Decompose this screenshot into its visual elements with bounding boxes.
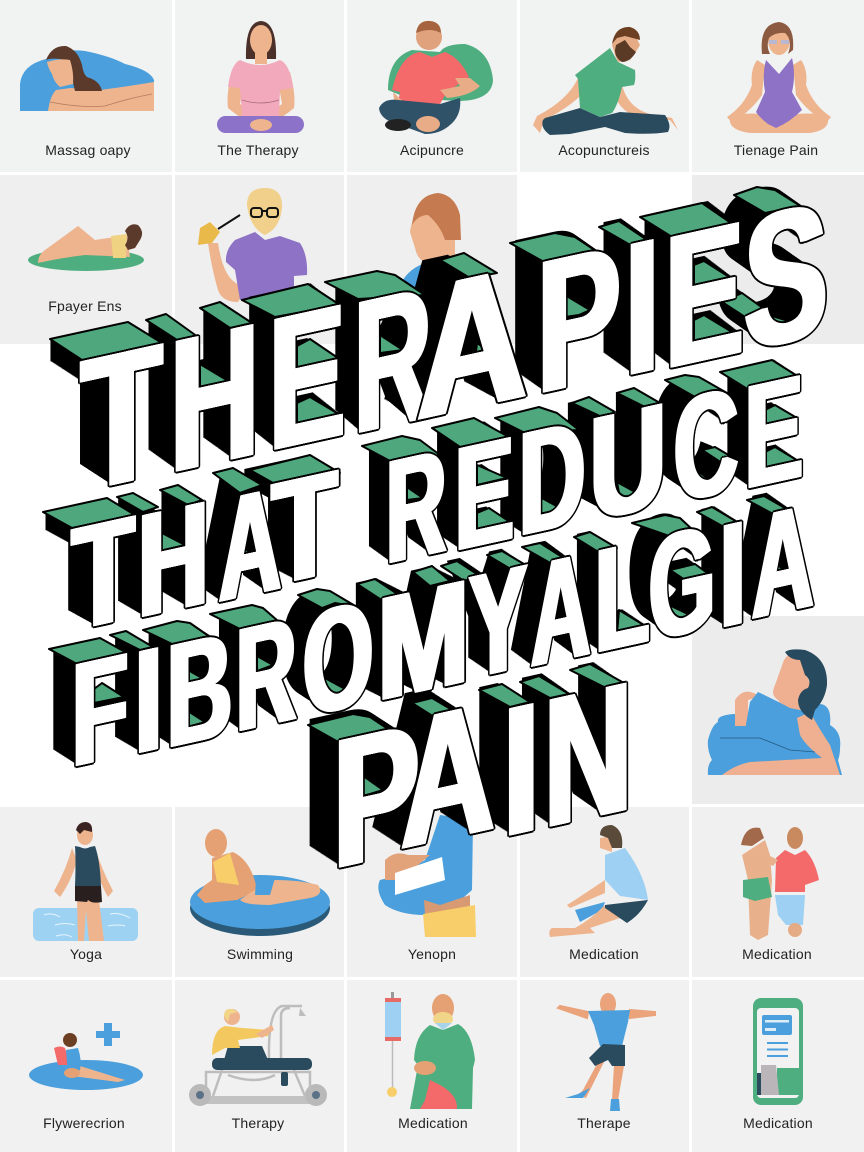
title line: FIBROMYALGIA: I xyxy=(720,489,745,660)
title xyxy=(42,162,828,909)
panel: yenopn xyxy=(347,807,517,977)
title: A xyxy=(752,472,813,651)
title: I xyxy=(625,198,660,417)
title: B xyxy=(167,600,232,780)
title line: THERAPIES: E xyxy=(268,263,345,492)
label: Medication xyxy=(742,946,812,962)
icon: bald man in purple shirt xyxy=(198,188,307,302)
label: The Therapy xyxy=(217,142,299,158)
title line: FIBROMYALGIA: R xyxy=(236,585,296,764)
icon: person on massage table xyxy=(20,46,154,111)
title line: FIBROMYALGIA: O xyxy=(303,568,373,749)
panel: man with hammer xyxy=(175,175,344,344)
panel: flywerecrion xyxy=(0,980,172,1152)
title line: FIBROMYALGIA: L xyxy=(595,508,650,685)
title line: PAIN xyxy=(333,643,632,909)
panel: yoga xyxy=(0,807,172,977)
icon: person lying on green mat xyxy=(28,224,144,271)
title line: PAIN: A xyxy=(401,662,495,889)
title: I xyxy=(720,489,745,660)
title line: THAT REDUCE xyxy=(70,343,804,663)
icon: seated woman in pink xyxy=(217,21,304,133)
title: E xyxy=(268,263,345,492)
title: L xyxy=(595,508,650,685)
title line: THAT REDUCE: A xyxy=(219,455,281,634)
title line: THERAPIES: T xyxy=(81,303,163,533)
panel: therapy chair xyxy=(175,980,344,1152)
panel: medication device xyxy=(692,980,864,1152)
title: I xyxy=(503,663,539,877)
title line: THERAPIES: P xyxy=(537,205,620,435)
title line: THERAPIES xyxy=(78,162,828,533)
icon: green medical device xyxy=(753,998,803,1105)
icon: seated man with green cushion xyxy=(379,21,493,134)
title: T xyxy=(81,303,163,533)
title: P xyxy=(333,684,419,909)
panel: woman on pillows xyxy=(692,616,864,804)
title line: THERAPIES: R xyxy=(354,246,432,475)
title: T xyxy=(272,438,337,618)
title: D xyxy=(519,388,585,568)
title line: THERAPIES: I xyxy=(625,198,660,417)
label: Acopunctureis xyxy=(558,142,650,158)
title line: FIBROMYALGIA: G xyxy=(649,493,716,673)
title: R xyxy=(236,585,296,764)
icon: two people xyxy=(741,827,819,940)
title line: FIBROMYALGIA: Y xyxy=(469,533,527,711)
title: T xyxy=(72,484,134,663)
title: A xyxy=(417,225,527,461)
title line: THAT REDUCE: H xyxy=(138,469,209,650)
title: A xyxy=(219,455,281,634)
panel: therape xyxy=(520,980,689,1152)
label: Medication xyxy=(743,1115,813,1131)
title line: THAT REDUCE: U xyxy=(590,371,666,553)
panel: medication IV xyxy=(347,980,517,1152)
title line: PAIN: P xyxy=(333,684,419,909)
title line: THERAPIES: A xyxy=(417,225,527,461)
panel: prayer ends xyxy=(0,175,172,344)
panel: medication stretch xyxy=(520,807,689,977)
title: Y xyxy=(469,533,527,711)
title line: THAT REDUCE: D xyxy=(519,388,585,568)
title line: FIBROMYALGIA: M xyxy=(378,548,468,733)
icon: man on blue float xyxy=(190,829,330,936)
icon: man stretching on floor xyxy=(549,825,648,937)
label: Therape xyxy=(577,1115,631,1131)
panel: top right second row xyxy=(692,175,864,344)
icon: arms holding paper xyxy=(378,815,476,937)
title line: THAT REDUCE: C xyxy=(674,356,739,535)
title: E xyxy=(665,181,744,410)
title line: THAT REDUCE: E xyxy=(744,343,802,521)
title: R xyxy=(386,417,446,596)
title: P xyxy=(537,205,620,435)
label: Swimming xyxy=(227,946,293,962)
icon: man with IV drip xyxy=(385,992,475,1109)
title line: FIBROMYALGIA: A xyxy=(752,472,813,651)
icon: person in pool with plus xyxy=(29,1023,143,1090)
title line: PAIN: I xyxy=(503,663,539,877)
icon: man on rehab machine xyxy=(189,1006,327,1106)
title: N xyxy=(544,643,632,868)
title: S xyxy=(744,162,828,392)
icon: man balancing with arms out xyxy=(558,993,655,1111)
label: Acipuncre xyxy=(400,142,464,158)
icon: person standing in water xyxy=(33,822,138,941)
title line: THERAPIES: E xyxy=(665,181,744,410)
title line: THAT REDUCE: R xyxy=(386,417,446,596)
panel: acupuncture 1 xyxy=(347,0,517,172)
title line: PAIN: N xyxy=(544,643,632,868)
title line: FIBROMYALGIA xyxy=(72,472,815,799)
title: F xyxy=(72,621,128,799)
panel: the therapy xyxy=(175,0,344,172)
label: Fpayer Ens xyxy=(48,298,122,314)
panel: acupuncture 2 xyxy=(520,0,689,172)
icon: brown-haired person xyxy=(398,193,462,370)
title line: THAT REDUCE: T xyxy=(272,438,337,618)
title: R xyxy=(354,246,432,475)
panel: person in blue shirt xyxy=(347,175,517,370)
label: Tienage Pain xyxy=(734,142,818,158)
title: E xyxy=(744,343,802,521)
label: Therapy xyxy=(232,1115,284,1131)
icon: woman reclining on blue cushions xyxy=(708,649,842,775)
title line: THERAPIES: H xyxy=(170,283,259,514)
title line: THERAPIES: S xyxy=(744,162,828,392)
label: Flywerecrion xyxy=(43,1115,125,1131)
icon: meditating woman in purple xyxy=(727,22,831,133)
title: H xyxy=(138,469,209,650)
title line: THAT REDUCE: E xyxy=(455,405,514,583)
title: A xyxy=(401,662,495,889)
title: C xyxy=(674,356,739,535)
title: A xyxy=(531,521,590,699)
panel: teenage pain xyxy=(692,0,864,172)
title: E xyxy=(455,405,514,583)
title: I xyxy=(135,615,162,786)
panel: swimming xyxy=(175,807,344,977)
title: O xyxy=(303,568,373,749)
title line: FIBROMYALGIA: F xyxy=(72,621,128,799)
panel: medication pair xyxy=(692,807,864,977)
title line: FIBROMYALGIA: I xyxy=(135,615,162,786)
title line: THAT REDUCE: T xyxy=(72,484,134,663)
title line: FIBROMYALGIA: A xyxy=(531,521,590,699)
title: U xyxy=(590,371,666,553)
title: H xyxy=(170,283,259,514)
icon: bearded man in green xyxy=(533,27,678,135)
title: M xyxy=(378,548,468,733)
title line: FIBROMYALGIA: B xyxy=(167,600,232,780)
label: Yenopn xyxy=(408,946,456,962)
label: Yoga xyxy=(70,946,102,962)
label: Medication xyxy=(569,946,639,962)
label: Medication xyxy=(398,1115,468,1131)
label: Massag oapy xyxy=(45,142,131,158)
title: G xyxy=(649,493,716,673)
panel: massage xyxy=(0,0,172,172)
